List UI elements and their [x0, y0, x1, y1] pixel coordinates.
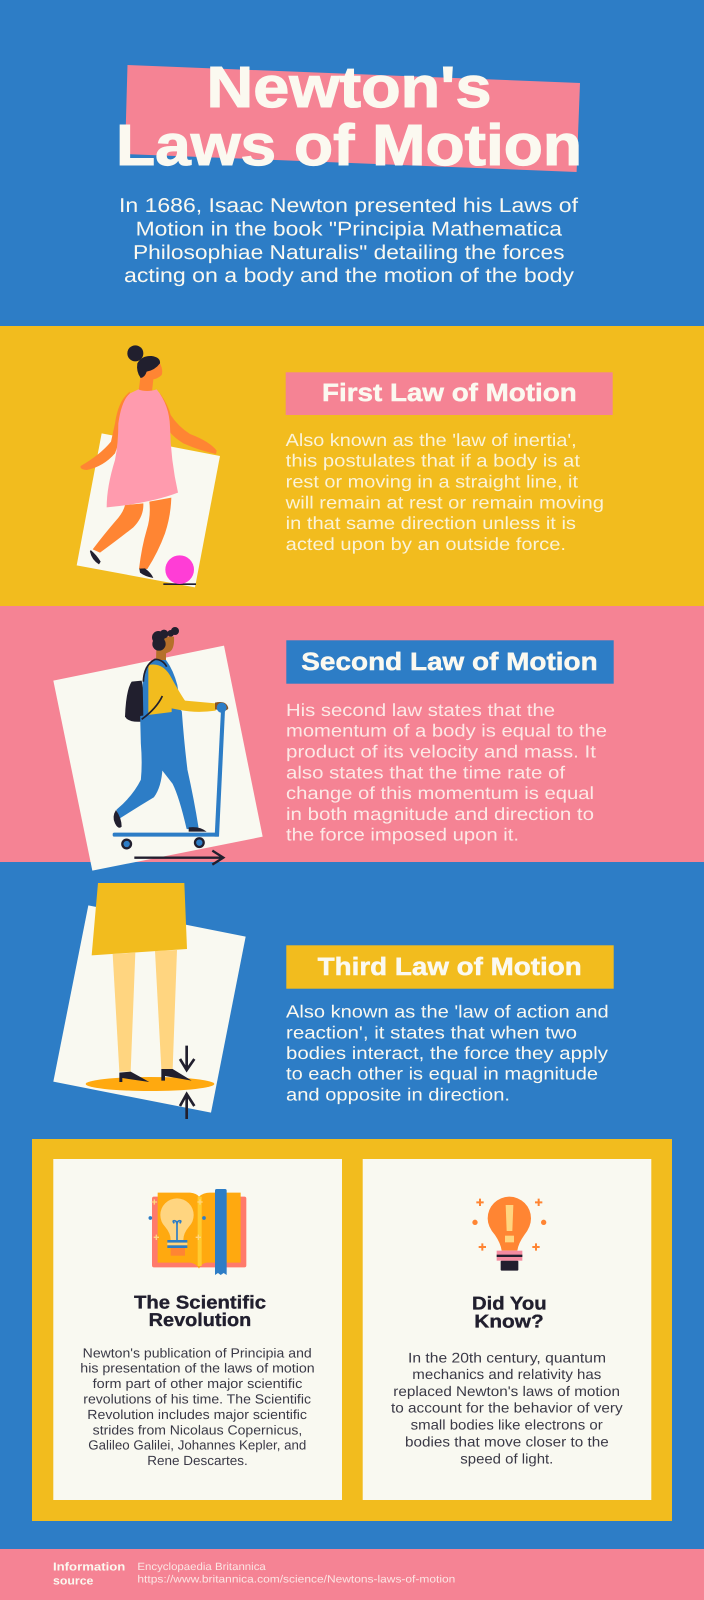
card text: strides from Nicolaus Copernicus,: [93, 1422, 302, 1437]
third law text: Also known as the 'law of action and: [286, 1001, 609, 1021]
panel: yellow cards frame: [32, 1139, 672, 1521]
first law text: acted upon by an outside force.: [286, 534, 566, 554]
second law heading: [286, 640, 614, 684]
information source label: Information: [53, 1562, 125, 1574]
intro text: [119, 195, 578, 287]
third law text: reaction', it states that when two: [286, 1022, 577, 1042]
card text: [80, 1345, 315, 1468]
title highlight: [125, 65, 580, 172]
illustration: woman kicking ball: [77, 345, 220, 587]
third law text: bodies interact, the force they apply: [286, 1043, 608, 1063]
card text: form part of other major scientific: [93, 1376, 303, 1391]
card text: Revolution includes major scientific: [87, 1407, 307, 1422]
second law heading: Second Law of Motion: [301, 648, 598, 676]
card heading: Revolution: [149, 1309, 251, 1330]
third law text: and opposite in direction.: [286, 1084, 510, 1104]
intro text: acting on a body and the motion of the body: [124, 265, 574, 287]
card text: revolutions of his time. The Scientific: [83, 1391, 311, 1406]
intro text: In 1686, Isaac Newton presented his Laws of: [119, 195, 578, 217]
card text: to account for the behavior of very: [391, 1400, 623, 1416]
third law heading: Third Law of Motion: [318, 953, 582, 981]
third law text: [286, 1001, 609, 1104]
first law heading: [286, 372, 613, 415]
card text: Newton's publication of Principia and: [83, 1345, 312, 1360]
icon: light bulb with exclamation mark: [472, 1197, 546, 1271]
card heading: Did You: [472, 1292, 547, 1313]
intro text: Philosophiae Naturalis" detailing the forces: [133, 242, 564, 264]
card text: Rene Descartes.: [147, 1453, 248, 1468]
second law text: [286, 700, 607, 845]
panel: scientific revolution card: [53, 1159, 342, 1500]
third law text: to each other is equal in magnitude: [286, 1064, 598, 1084]
panel: second law background: [0, 606, 704, 862]
information source text: https://www.britannica.com/science/Newtons-laws-of-motion: [137, 1574, 455, 1586]
second law text: momentum of a body is equal to the: [286, 721, 607, 741]
card heading: The Scientific: [134, 1291, 266, 1312]
panel: footer: [0, 1549, 704, 1600]
second law text: also states that the time rate of: [286, 762, 565, 782]
first law text: [285, 430, 604, 554]
card heading: [472, 1292, 547, 1331]
third law heading: [286, 945, 614, 989]
second law text: the force imposed upon it.: [286, 825, 519, 845]
first law text: in that same direction unless it is: [286, 513, 576, 533]
card text: Galileo Galilei, Johannes Kepler, and: [88, 1438, 306, 1453]
panel: third law and cards background: [0, 862, 704, 1549]
icon: book with light bulb: [148, 1189, 246, 1275]
card text: [391, 1349, 623, 1466]
first law text: Also known as the 'law of inertia',: [286, 430, 577, 450]
first law text: rest or moving in a straight line, it: [286, 471, 578, 491]
card text: mechanics and relativity has: [412, 1366, 601, 1382]
information source text: Encyclopaedia Britannica: [137, 1561, 266, 1573]
intro text: Motion in the book "Principia Mathematica: [136, 218, 563, 240]
second law text: product of its velocity and mass. It: [286, 742, 596, 762]
first law text: will remain at rest or remain moving: [285, 492, 604, 512]
card text: small bodies like electrons or: [411, 1417, 603, 1433]
first law heading: First Law of Motion: [322, 379, 577, 407]
title: Newton's: [206, 55, 492, 120]
first law text: this postulates that if a body is at: [286, 451, 580, 471]
second law text: in both magnitude and direction to: [286, 804, 594, 824]
card text: In the 20th century, quantum: [408, 1349, 606, 1365]
card text: speed of light.: [460, 1450, 553, 1466]
card text: bodies that move closer to the: [405, 1433, 609, 1449]
card text: his presentation of the laws of motion: [80, 1361, 315, 1376]
title: Laws of Motion: [116, 113, 582, 178]
second law text: change of this momentum is equal: [286, 783, 594, 803]
card heading: Know?: [474, 1310, 544, 1331]
panel: header background: [0, 0, 704, 326]
card heading: [134, 1291, 266, 1330]
panel: did you know card: [363, 1159, 651, 1500]
panel: first law background: [0, 326, 704, 606]
card text: replaced Newton's laws of motion: [393, 1383, 620, 1399]
information source label: source: [53, 1575, 93, 1587]
title: [116, 55, 582, 178]
illustration: person on scooter: [53, 627, 263, 871]
illustration: legs standing with force arrows: [53, 883, 246, 1119]
information source text: [137, 1561, 455, 1586]
information source label: [53, 1562, 125, 1587]
second law text: His second law states that the: [286, 700, 555, 720]
